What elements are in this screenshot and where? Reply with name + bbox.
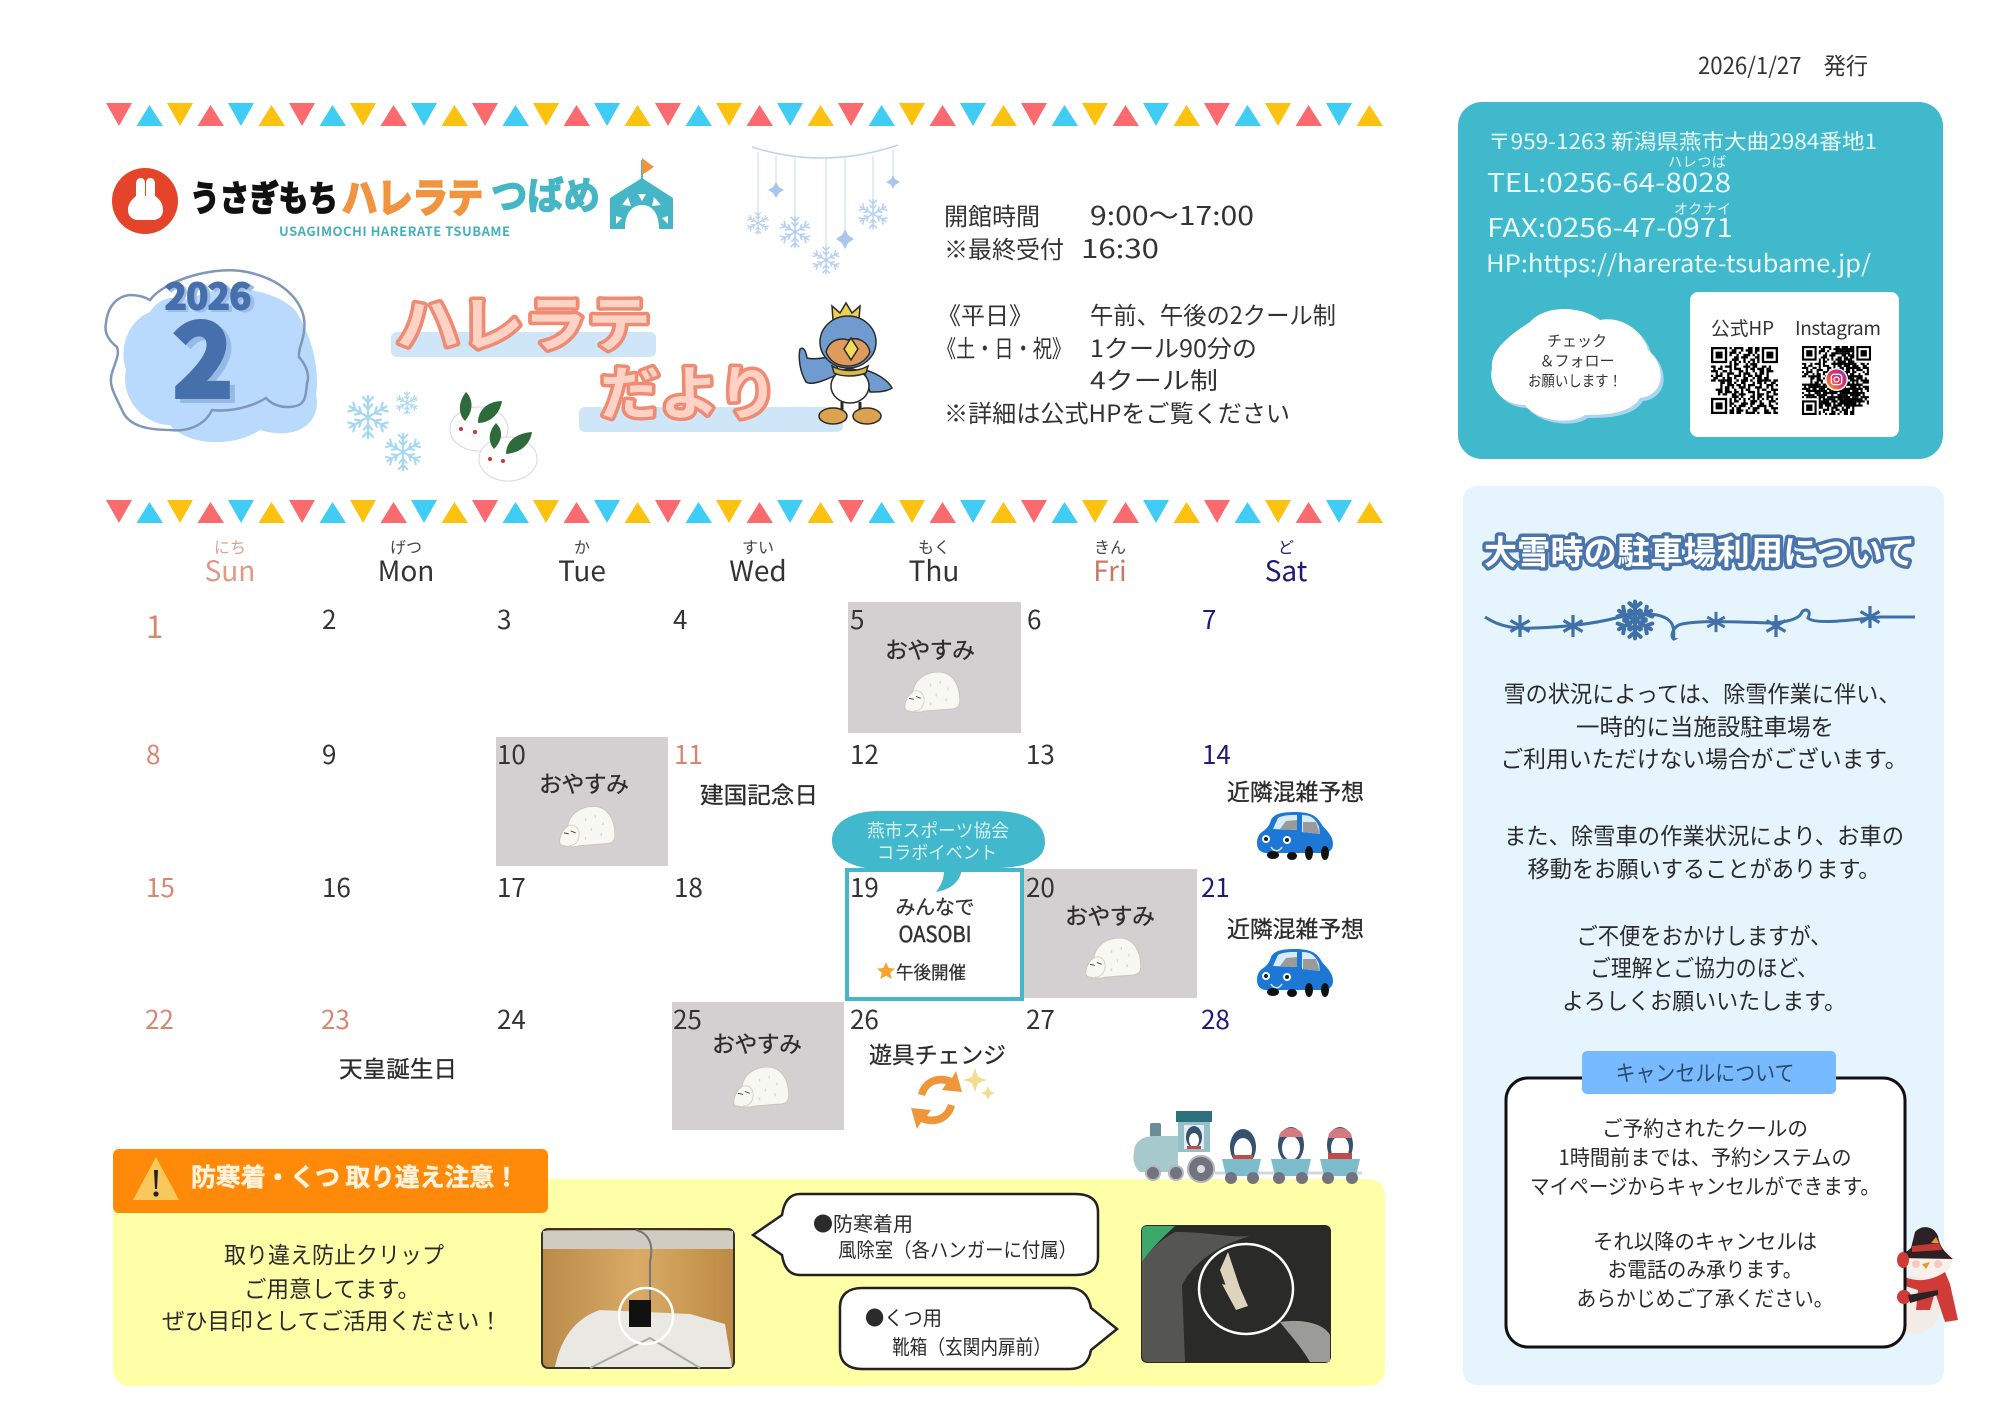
panel: heavy snow parking [1463, 486, 1958, 1385]
fax: オクナイ [1674, 199, 1731, 219]
opening hours text: 9:00～17:00 [1090, 196, 1254, 233]
cloud outline [105, 270, 308, 430]
date numbers: 3 [497, 600, 511, 637]
opening hours text [937, 196, 1336, 429]
yellow panel [113, 1179, 1385, 1386]
holidays and events: 遊具チェンジ [869, 1036, 1006, 1070]
weekday headers: Mon [378, 550, 434, 590]
date numbers: 17 [497, 868, 526, 905]
weekday headers: すい [742, 534, 774, 558]
opening hours text: 16:30 [1081, 229, 1159, 266]
weekday headers: Thu [909, 550, 959, 590]
icon: rabbit badge [112, 168, 178, 234]
date numbers: 23 [321, 1000, 350, 1037]
heading: 大雪時の駐車場利用について [1484, 526, 1915, 574]
cloud callout [1491, 309, 1664, 424]
paragraph 3: ご不便をおかけしますが、 [1576, 917, 1832, 951]
date numbers: 4 [673, 600, 687, 637]
panel: contact info [1458, 102, 1943, 459]
event bubble [832, 811, 1045, 892]
cancel text: 1時間前までは、予約システムの [1558, 1142, 1852, 1172]
date numbers: 11 [674, 735, 703, 772]
fax [1487, 199, 1733, 245]
event cell: OASOBI: 19 [850, 868, 879, 905]
opening hours text: ※詳細は公式HPをご覧ください [944, 394, 1290, 429]
closed day labels: おやすみ [885, 631, 975, 665]
callout: coat clip: 風除室（各ハンガーに付属） [838, 1234, 1077, 1263]
month number: 2 [179, 287, 237, 429]
title text [396, 277, 778, 431]
QR code box: 公式HP [1711, 314, 1774, 341]
QR code: official site [1711, 347, 1778, 414]
logo text [190, 165, 600, 240]
illustration: snowman body [1885, 1227, 1958, 1334]
cancel label: キャンセルについて [1616, 1056, 1794, 1088]
hanging snowflakes [747, 145, 900, 274]
cancel text: それ以降のキャンセルは [1593, 1226, 1817, 1256]
event cell: OASOBI: OASOBI [898, 917, 972, 949]
logo [112, 158, 673, 240]
bunting middle [106, 500, 1386, 524]
holidays and events: 建国記念日 [700, 776, 818, 810]
weekday headers: もく [918, 534, 950, 558]
paragraph 1: 一時的に当施設駐車場を [1576, 708, 1834, 742]
paragraph 3: よろしくお願いいたします。 [1562, 982, 1846, 1016]
weekday headers: Sun [205, 550, 255, 590]
icon: snowflakes left [347, 392, 421, 470]
opening hours text: 1クール90分の [1090, 329, 1257, 364]
logo text: USAGIMOCHI HARERATE TSUBAME [279, 221, 510, 240]
cloud callout: チェック [1547, 330, 1607, 351]
paragraph 2: また、除雪車の作業状況により、お車の [1504, 817, 1904, 851]
weekday headers: にち [214, 534, 246, 558]
weekday headers: げつ [390, 534, 422, 558]
cancel text: あらかじめご了承ください。 [1576, 1283, 1834, 1313]
icon: car [1257, 812, 1333, 997]
cancel policy box [1506, 1051, 1905, 1347]
cancel label [1582, 1051, 1836, 1094]
weekday headers: Fri [1093, 550, 1127, 590]
icon: snow rabbits [450, 392, 537, 481]
paragraph 2 [1504, 817, 1904, 884]
callout: shoe clip [840, 1288, 1117, 1369]
holidays and events: 近隣混雑予想 [1227, 910, 1364, 944]
date numbers: 28 [1201, 1000, 1230, 1037]
date numbers: 19 [850, 868, 879, 905]
opening hours text: 午前、午後の2クール制 [1090, 296, 1336, 331]
decorative snow line [1485, 602, 1915, 639]
year: 2026 [165, 269, 251, 320]
phone: ハレつば [1668, 152, 1726, 172]
photo: hanger with clip [542, 1229, 734, 1368]
paragraph 2: 移動をお願いすることがあります。 [1528, 850, 1880, 884]
notice text: 取り違え防止クリップ [224, 1236, 444, 1270]
paragraph 1 [1500, 675, 1908, 774]
callout: shoe clip: 靴箱（玄関内扉前） [892, 1331, 1051, 1360]
icon: warning [133, 1157, 179, 1200]
date numbers: 21 [1201, 868, 1230, 905]
bunting top [106, 103, 1386, 127]
address: 〒959-1263 新潟県燕市大曲2984番地1 [1488, 126, 1877, 156]
cancel text [1530, 1113, 1880, 1313]
weekday headers [205, 534, 1308, 590]
closed day labels: おやすみ [539, 765, 629, 799]
weekday headers: ど [1278, 534, 1294, 558]
closed day labels [539, 631, 1155, 1059]
date numbers: 8 [146, 735, 160, 772]
title text: だより [600, 347, 778, 431]
weekday headers: Tue [558, 550, 606, 590]
date numbers: 25 [673, 1000, 702, 1037]
website: HP:https://harerate-tsubame.jp/ [1486, 244, 1872, 279]
event cell: OASOBI: 午後開催 [896, 959, 966, 985]
QR code: instagram [1802, 346, 1871, 415]
date numbers: 26 [850, 1000, 879, 1037]
callout: coat clip [753, 1194, 1098, 1275]
cancel text: お電話のみ承ります。 [1608, 1254, 1802, 1284]
weekday headers: Sat [1265, 550, 1308, 590]
weekday headers: Wed [729, 550, 787, 590]
cancel text: マイページからキャンセルができます。 [1530, 1171, 1880, 1201]
date numbers: 14 [1202, 735, 1231, 772]
logo text: つばめ [491, 165, 600, 220]
notice text: ぜひ目印としてご活用ください！ [162, 1302, 502, 1336]
title text: ハレラテ [396, 277, 651, 364]
date numbers: 2 [322, 600, 336, 637]
closed day labels: おやすみ [1065, 897, 1155, 931]
date numbers: 12 [850, 735, 879, 772]
holidays and events: 天皇誕生日 [339, 1050, 457, 1084]
date numbers: 5 [850, 600, 864, 637]
opening hours text: ※最終受付 [944, 230, 1064, 265]
icon: mascot bird [799, 303, 892, 424]
date numbers [145, 600, 1231, 1037]
holidays and events: 近隣混雑予想 [1227, 773, 1364, 807]
date of issue: 2026/1/27 発行 [1698, 47, 1868, 81]
cloud callout: お願いします！ [1528, 370, 1622, 391]
fax: FAX:0256-47-0971 [1487, 208, 1733, 245]
paragraph 1: ご利用いただけない場合がございます。 [1500, 740, 1908, 774]
photo: shoe with clip [1141, 1225, 1331, 1363]
icon: tent with flag [610, 158, 673, 229]
date numbers: 1 [146, 602, 163, 647]
date numbers: 13 [1026, 735, 1055, 772]
logo text: ハレラテ [342, 166, 483, 224]
panel: clip notice [113, 1149, 1385, 1386]
title highlight bars [391, 332, 843, 432]
icon: snowman mittens [1897, 1252, 1938, 1304]
closed day cells [496, 602, 1197, 1130]
cloud fill [123, 289, 317, 442]
notice text: ご用意してます。 [244, 1270, 420, 1304]
date numbers: 15 [146, 868, 175, 905]
holidays and events [339, 773, 1364, 1084]
opening hours text: 《土・日・祝》 [937, 329, 1071, 364]
event cell: OASOBI: みんなで [896, 891, 974, 920]
callout: coat clip: ●防寒着用 [813, 1208, 913, 1237]
callout: shoe clip: ●くつ用 [865, 1302, 942, 1331]
date numbers: 6 [1027, 600, 1041, 637]
title: ハレラテだより [391, 277, 843, 432]
QR code box [1690, 292, 1899, 437]
date numbers: 7 [1202, 600, 1216, 637]
date numbers: 27 [1026, 1000, 1055, 1037]
opening hours text: 《平日》 [937, 296, 1033, 331]
opening hours text: 4クール制 [1090, 361, 1218, 396]
phone [1487, 152, 1731, 200]
date numbers: 24 [497, 1000, 526, 1037]
weekday headers: きん [1094, 534, 1126, 558]
phone: TEL:0256-64-8028 [1487, 163, 1731, 200]
date numbers: 10 [497, 735, 526, 772]
orange heading: 防寒着・くつ 取り違え注意！ [191, 1158, 519, 1194]
date numbers: 16 [322, 868, 351, 905]
paragraph 1: 雪の状況によっては、除雪作業に伴い、 [1504, 675, 1900, 709]
cloud callout: ＆フォロー [1539, 350, 1615, 371]
notice text [162, 1236, 502, 1336]
QR code box: Instagram [1795, 314, 1881, 341]
event cell: OASOBI [847, 868, 1022, 999]
calendar [145, 534, 1364, 1130]
orange heading [113, 1149, 548, 1213]
date numbers: 22 [145, 1000, 174, 1037]
paragraph 3: ご理解とご協力のほど、 [1590, 949, 1818, 983]
date numbers: 9 [322, 735, 336, 772]
paragraph 3 [1562, 917, 1846, 1016]
month badge cloud [105, 269, 317, 442]
month number: 2 [174, 283, 232, 425]
closed day labels: おやすみ [712, 1025, 802, 1059]
illustration: penguin train [1133, 1111, 1362, 1184]
event bubble: コラボイベント [877, 839, 997, 865]
cancel text: ご予約されたクールの [1602, 1113, 1808, 1143]
logo text: うさぎもち [190, 171, 338, 222]
event bubble: 燕市スポーツ協会 [867, 817, 1009, 843]
date numbers: 18 [674, 868, 703, 905]
weekday headers: か [574, 534, 590, 558]
date numbers: 20 [1026, 868, 1055, 905]
icon: swap arrows [911, 1068, 995, 1129]
opening hours text: 開館時間 [944, 197, 1040, 232]
year: 2026 [167, 271, 255, 322]
icon: sleeping sheep [560, 672, 1141, 1107]
